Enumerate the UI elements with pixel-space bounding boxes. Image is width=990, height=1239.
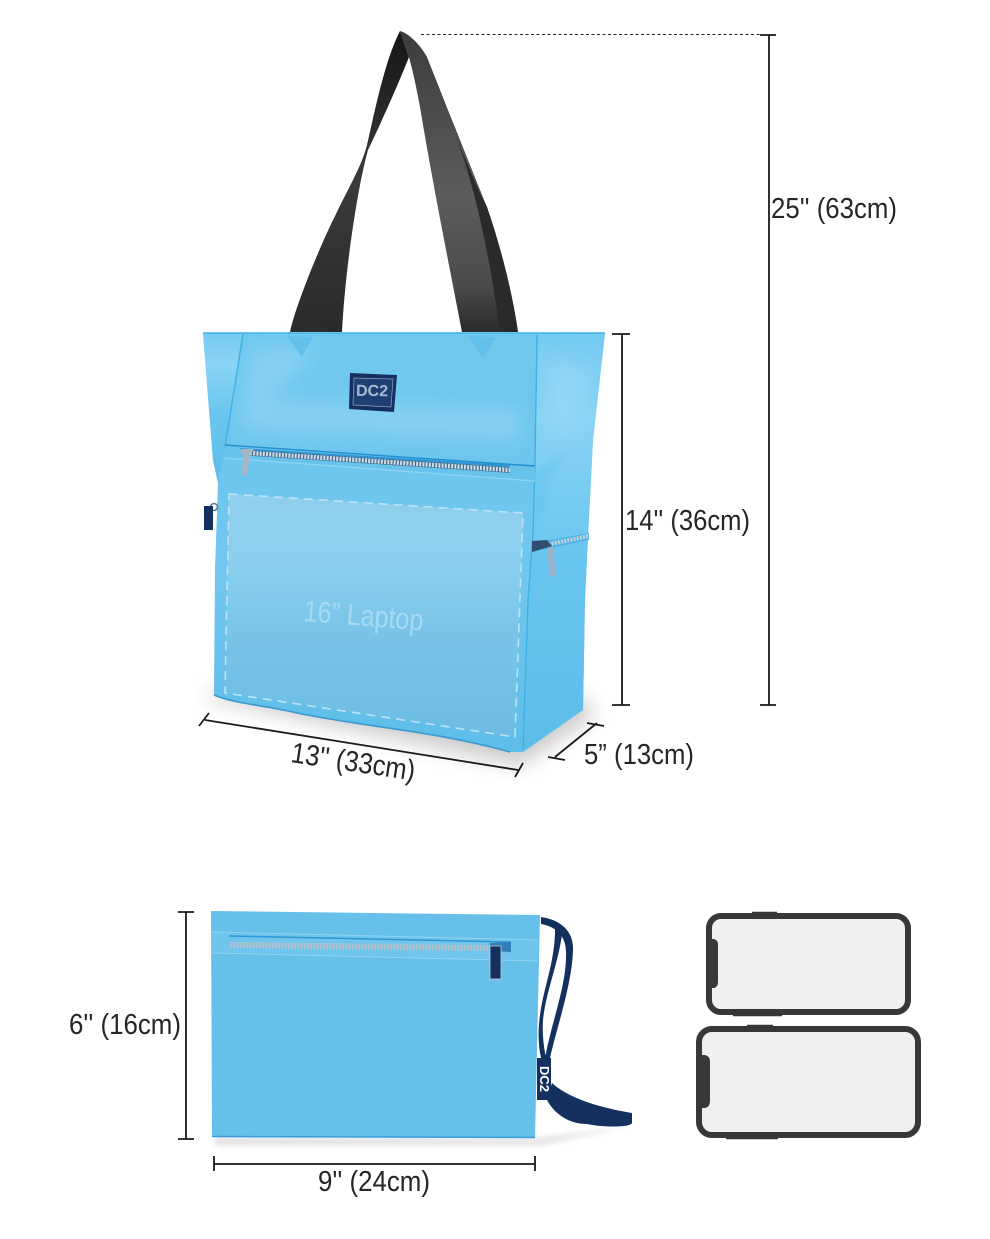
pouch bbox=[211, 911, 632, 1146]
dimension: pouch width 9 in bbox=[214, 1156, 535, 1198]
dimension: bag height 14 in: 14'' (36cm) bbox=[625, 505, 750, 537]
brand badge bbox=[349, 373, 397, 412]
dimension: total height 25 in bbox=[760, 35, 897, 705]
wrist strap bbox=[541, 917, 573, 1058]
laptop outline area bbox=[225, 494, 523, 737]
dimension: depth 5 in bbox=[548, 723, 694, 771]
icon: smaller phone bbox=[709, 913, 908, 1015]
pouch zipper bbox=[212, 932, 538, 979]
dimension: pouch height 6 in bbox=[69, 912, 194, 1139]
soft highlights bbox=[240, 345, 590, 450]
icon: larger phone bbox=[699, 1026, 918, 1138]
front strap bbox=[400, 31, 518, 332]
dimension: bag height 14 in bbox=[612, 334, 750, 705]
dimension: total height 25 in: 25'' (63cm) bbox=[771, 193, 897, 225]
seams bbox=[203, 333, 605, 750]
strap label bbox=[537, 1058, 552, 1100]
left gusset bbox=[203, 333, 243, 483]
left zipper tag bbox=[204, 504, 218, 530]
bag body bbox=[203, 333, 605, 752]
dimension: pouch height 6 in: 6'' (16cm) bbox=[69, 1009, 181, 1041]
dimension: pouch width 9 in: 9'' (24cm) bbox=[318, 1166, 430, 1198]
strap fold bbox=[455, 135, 518, 332]
brand badge: DC2 bbox=[356, 383, 388, 400]
bottom edge bbox=[214, 695, 510, 752]
back strap bbox=[290, 31, 409, 332]
gusset tabs bbox=[287, 336, 496, 359]
laptop label: 16” Laptop bbox=[302, 595, 425, 637]
dimension: depth 5 in: 5” (13cm) bbox=[584, 739, 694, 771]
side zipper bbox=[532, 533, 589, 577]
side crease bbox=[534, 440, 592, 530]
height dotted guide bbox=[421, 34, 762, 36]
pouch body bbox=[211, 911, 540, 1138]
pouch shadow bbox=[215, 1126, 630, 1146]
dimension: width 13 in bbox=[199, 713, 523, 787]
right gusset bbox=[523, 333, 605, 752]
front pocket zipper bbox=[225, 445, 535, 481]
bag shadow bbox=[205, 690, 592, 766]
tote bag bbox=[203, 31, 605, 766]
dimension: width 13 in: 13'' (33cm) bbox=[289, 737, 417, 787]
strap label: DC2 bbox=[537, 1066, 552, 1092]
